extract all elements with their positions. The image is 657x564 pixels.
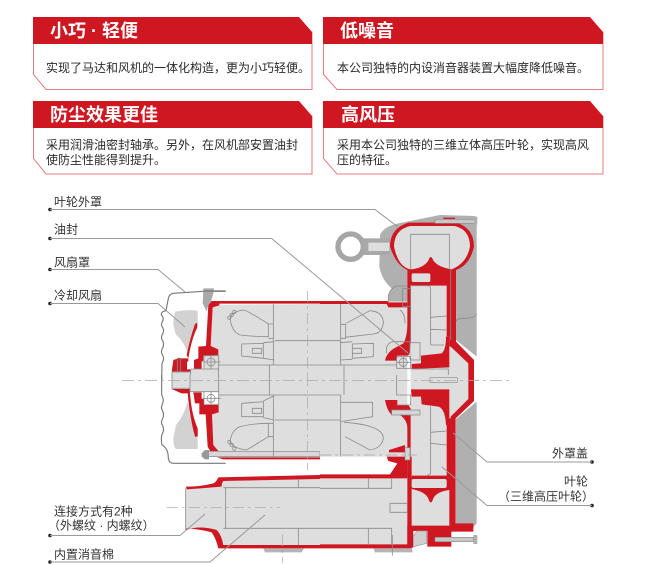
panel: compact and light: 实现了马达和风机的一体化构造，更为小巧轻便。 <box>46 60 310 75</box>
leader: fan cover <box>48 254 185 292</box>
panel: compact and light <box>33 17 312 90</box>
leader: cooling fan <box>48 288 185 327</box>
leader: oil seal: 油封 <box>54 222 78 236</box>
panel: low noise: 低噪音 <box>340 20 394 41</box>
panel: better dust protection: 采用润滑油密封轴承。另外，在风机部安置油封 <box>46 137 298 152</box>
panel: low noise: 本公司独特的内设消音器装置大幅度降低噪音。 <box>337 60 589 75</box>
panel: high pressure: 高风压 <box>341 104 395 125</box>
leader: fan cover: 风扇罩 <box>54 254 90 270</box>
leader: outer cover <box>453 433 594 464</box>
silencer section <box>186 479 320 547</box>
leader: connection types: （外螺纹 · 内螺纹） <box>48 518 155 532</box>
leader: connection types: 连接方式有2种 <box>54 504 133 518</box>
leader: cooling fan: 冷却风扇 <box>54 288 102 302</box>
leader: impeller: （三维高压叶轮） <box>498 488 594 504</box>
panel: compact and light: 小巧 · 轻便 <box>50 21 138 41</box>
impeller casing lower right <box>320 375 477 556</box>
leader: connection types <box>48 504 205 537</box>
panel: high pressure <box>323 101 603 174</box>
panel: high pressure: 压的特征。 <box>337 152 397 167</box>
panel: better dust protection <box>33 101 312 174</box>
motor and fan lower left <box>161 375 320 563</box>
leader: oil seal <box>48 222 408 353</box>
cross-section diagram of blower <box>122 215 510 563</box>
leader: built-in silencing cotton: 内置消音棉 <box>54 546 114 562</box>
panel: better dust protection: 使防尘性能得到提升。 <box>46 152 166 167</box>
leader: impeller <box>442 467 594 507</box>
panel: low noise <box>323 17 603 90</box>
leader: impeller cover <box>48 195 398 227</box>
motor and fan upper left <box>161 288 320 380</box>
panel: better dust protection: 防尘效果更佳 <box>50 104 158 125</box>
leader: impeller: 叶轮 <box>564 474 588 488</box>
leader: impeller cover: 叶轮外罩 <box>54 195 102 209</box>
leader: built-in silencing cotton <box>48 515 265 564</box>
panel: high pressure: 采用本公司独特的三维立体高压叶轮，实现高风 <box>337 137 589 152</box>
impeller casing upper right <box>320 215 477 380</box>
leader: outer cover: 外罩盖 <box>552 446 588 460</box>
